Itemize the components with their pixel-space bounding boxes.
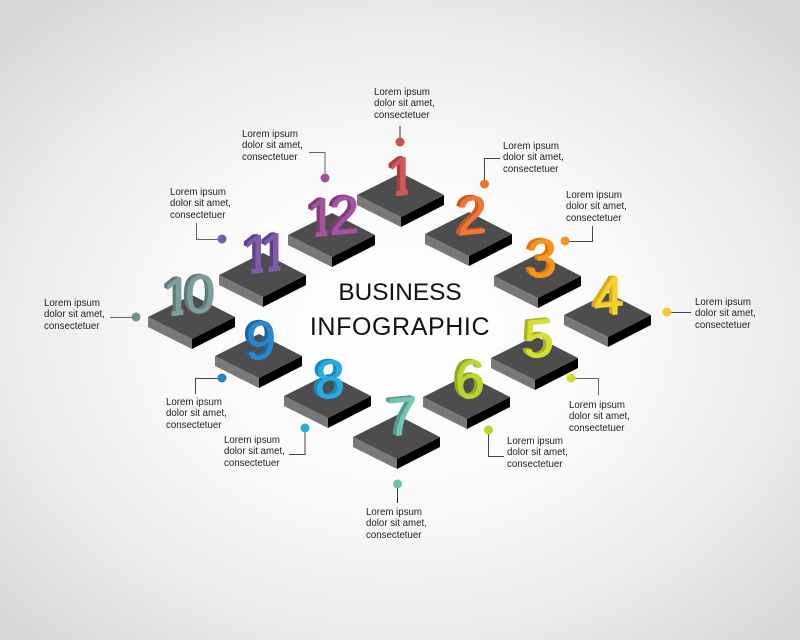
number 12: 1	[307, 186, 337, 249]
text block 8: dolor sit amet,	[224, 446, 285, 457]
marker 3	[560, 226, 592, 246]
platform 6	[423, 375, 510, 429]
text block 12: Lorem ipsum	[242, 129, 298, 140]
number 2: 2	[457, 184, 487, 247]
text block 7	[366, 507, 427, 541]
text block 6	[507, 436, 568, 470]
marker 5	[566, 374, 598, 395]
text block 10: consectetuer	[44, 321, 99, 332]
platform 9	[215, 334, 302, 388]
text block 6: Lorem ipsum	[507, 436, 563, 447]
number 7: 7	[387, 385, 417, 448]
number 8: 8	[315, 348, 345, 411]
number 4: 4	[594, 265, 624, 328]
number 1: 1	[387, 145, 417, 208]
text block 8: Lorem ipsum	[224, 435, 280, 446]
number 10	[164, 263, 215, 326]
text block 11: consectetuer	[170, 210, 225, 221]
text block 5: consectetuer	[569, 423, 624, 434]
text block 2: dolor sit amet,	[503, 152, 564, 163]
text block 11	[170, 187, 231, 221]
number 3: 3	[527, 227, 557, 290]
text block 5	[569, 400, 630, 434]
text block 9: consectetuer	[166, 420, 221, 431]
text block 12: dolor sit amet,	[242, 140, 303, 151]
text block 11: Lorem ipsum	[170, 187, 226, 198]
title: BUSINESS	[338, 279, 462, 306]
platform 8	[284, 374, 371, 428]
platform 7	[353, 415, 440, 469]
number 11	[244, 232, 280, 274]
text block 3: consectetuer	[566, 213, 621, 224]
text block 7: dolor sit amet,	[366, 518, 427, 529]
text block 6: consectetuer	[507, 459, 562, 470]
platform 3	[494, 254, 581, 308]
platform 5	[491, 336, 578, 390]
text block 10: Lorem ipsum	[44, 298, 100, 309]
text block 4	[695, 297, 756, 331]
title	[310, 279, 490, 341]
text block 3	[566, 190, 627, 224]
text block 1	[374, 87, 435, 121]
text block 4: dolor sit amet,	[695, 308, 756, 319]
text block 9: dolor sit amet,	[166, 408, 227, 419]
number 11: 1	[242, 223, 272, 286]
text block 5: dolor sit amet,	[569, 411, 630, 422]
marker 11	[196, 223, 226, 244]
text block 9: Lorem ipsum	[166, 397, 222, 408]
marker 2	[480, 158, 500, 188]
text block 3: Lorem ipsum	[566, 190, 622, 201]
marker 7	[393, 480, 402, 503]
text block 6: dolor sit amet,	[507, 447, 568, 458]
platform 4	[564, 293, 651, 347]
marker 10	[110, 312, 140, 322]
text block 8: consectetuer	[224, 458, 279, 469]
marker 12	[309, 152, 330, 182]
text block 7: consectetuer	[366, 530, 421, 541]
title: INFOGRAPHIC	[310, 313, 490, 341]
text block 11: dolor sit amet,	[170, 198, 231, 209]
marker 4	[662, 308, 691, 316]
platform 12	[288, 213, 375, 267]
text block 2	[503, 141, 564, 175]
number 6: 6	[455, 348, 485, 411]
platform 1	[357, 173, 444, 227]
number 10: 1	[163, 265, 193, 328]
text block 10	[44, 298, 105, 332]
text block 9	[166, 397, 227, 431]
text block 1: Lorem ipsum	[374, 87, 430, 98]
number 12	[308, 184, 359, 247]
number 9: 9	[246, 309, 276, 372]
marker 8	[289, 424, 310, 454]
text block 12	[242, 129, 303, 163]
text block 1: consectetuer	[374, 110, 429, 121]
text block 5: Lorem ipsum	[569, 400, 625, 411]
text block 12: consectetuer	[242, 152, 297, 163]
number 5: 5	[524, 307, 554, 370]
number 10: 0	[185, 263, 215, 326]
text block 2: Lorem ipsum	[503, 141, 559, 152]
text block 2: consectetuer	[503, 164, 558, 175]
text block 4: Lorem ipsum	[695, 297, 751, 308]
number 12: 2	[329, 184, 359, 247]
marker 1	[396, 126, 404, 146]
text block 10: dolor sit amet,	[44, 309, 105, 320]
marker 9	[196, 374, 226, 394]
text block 4: consectetuer	[695, 320, 750, 331]
platform 2	[425, 212, 512, 266]
text block 7: Lorem ipsum	[366, 507, 422, 518]
text block 3: dolor sit amet,	[566, 201, 627, 212]
number 11: 1	[260, 221, 290, 284]
text block 1: dolor sit amet,	[374, 98, 435, 109]
platform 11	[219, 253, 306, 307]
platform 10	[148, 295, 235, 349]
text block 8	[224, 435, 285, 469]
marker 6	[484, 426, 504, 456]
